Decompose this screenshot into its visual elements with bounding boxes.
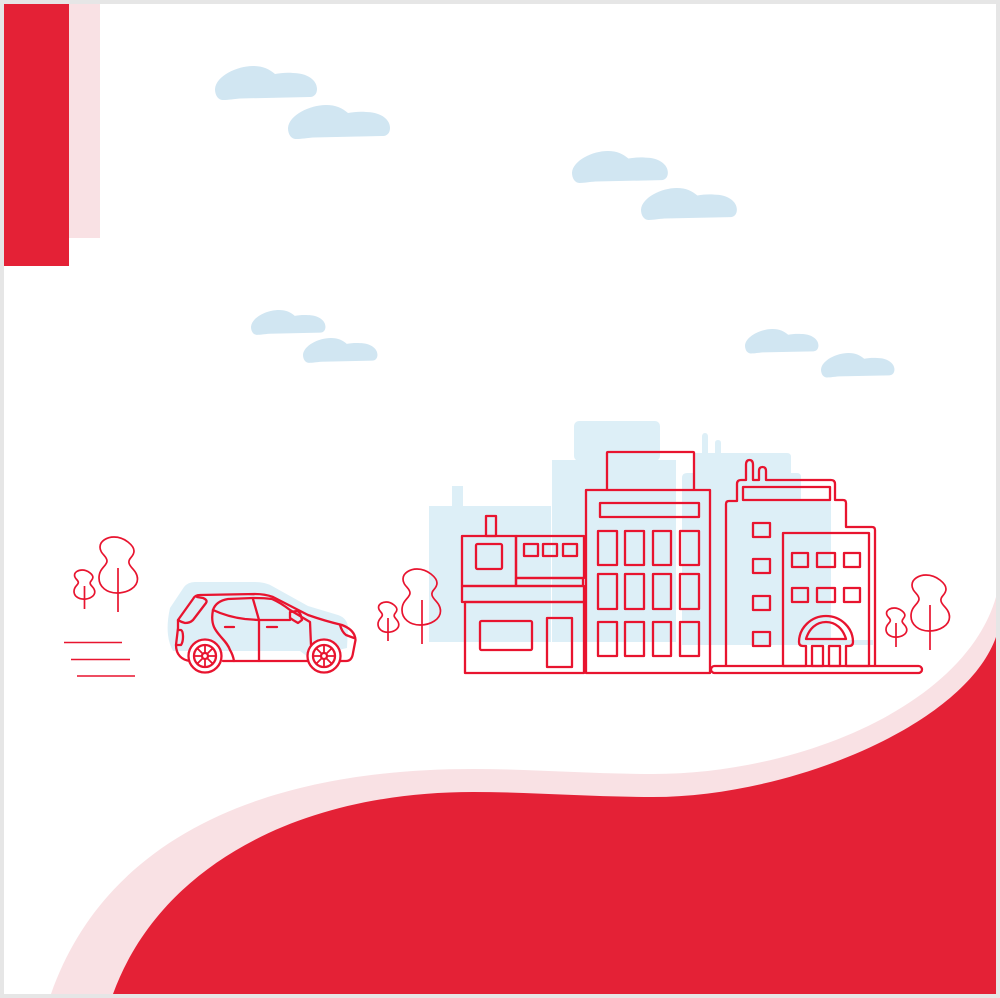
- front wheel: [308, 640, 340, 672]
- left building: [462, 516, 584, 673]
- buildings: [462, 452, 922, 673]
- road lines: [64, 642, 135, 676]
- trees: [74, 537, 950, 650]
- top-left red banner: [4, 4, 100, 266]
- tall building: [586, 452, 710, 673]
- right building: [711, 460, 922, 673]
- car body: [176, 594, 356, 661]
- car: [168, 582, 356, 672]
- bottom wave: [51, 597, 996, 994]
- rear wheel: [188, 640, 222, 672]
- background city silhouette: [429, 421, 873, 645]
- car shadow: [168, 582, 348, 657]
- clouds: [215, 66, 894, 377]
